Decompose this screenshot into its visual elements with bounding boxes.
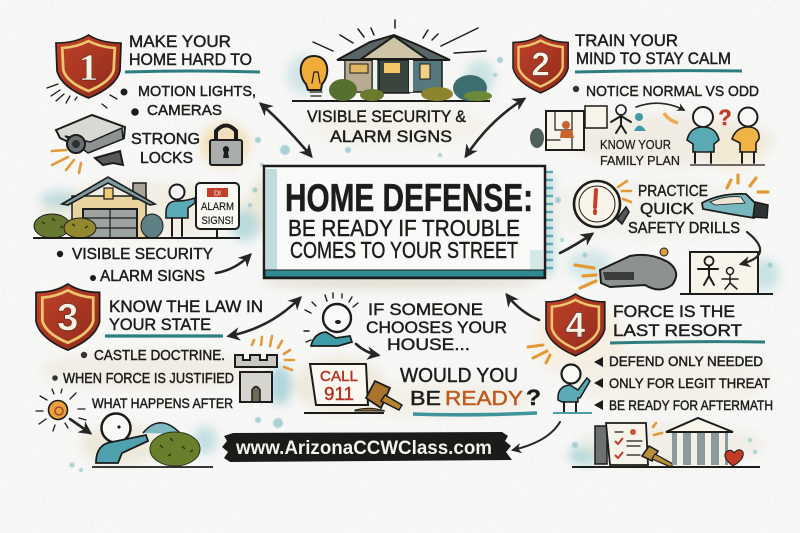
icon: drill board with stick figures [680,252,773,294]
heading: train your mind to stay calm [575,31,731,68]
heading: train your mind to stay calm: MIND TO STAY CALM [576,49,731,68]
label: visible security and alarm signs: ALARM SIGNS [330,127,452,146]
list: motion lights, cameras: MOTION LIGHTS, [138,83,256,100]
subtitle: be ready if trouble comes to your street [288,215,520,263]
label: strong locks: LOCKS [140,150,193,167]
icon: whistle [575,248,676,290]
icon: shield 3 [36,284,100,350]
icon: person holding alarm sign: DI [214,190,221,198]
label: visible security and alarm signs: VISIBLE SECURITY & [307,107,467,126]
list: notice normal vs odd: NOTICE NORMAL VS ODD [586,83,759,100]
icon: padlock [210,126,242,165]
icon: light bulb [301,56,327,96]
icon: shield 4 [546,294,605,356]
list: visible security alarm signs [57,246,213,285]
arrow: title to drills [560,234,592,253]
label: strong locks [131,131,200,167]
icon: gavel small [642,423,673,467]
label: practice quick safety drills: SAFETY DRILLS [628,220,740,237]
list: visible security alarm signs: VISIBLE SECURITY [72,246,213,263]
icon: shield 3: 3 [57,297,78,339]
label: practice quick safety drills [628,183,740,237]
heading: make your home hard to: HOME HARD TO [129,50,252,69]
watercolor washes [40,55,779,467]
icon: heart [725,450,743,466]
panel: step 4 force is the last resort [528,294,773,467]
arrow: top right double [466,99,524,156]
callout: would you be ready: WOULD YOU [400,365,518,387]
panel: step 1 make your home hard to [33,32,260,285]
panel: step 3 know the law [36,284,294,467]
list: castle doctrine, force, after [52,347,234,411]
icon: house with garage [34,177,163,238]
heading: make your home hard to [129,32,252,69]
callout: would you be ready: BE [410,388,441,410]
icon: two people with question mark [664,105,765,165]
list: defend, legit threat, aftermath [594,353,773,413]
icon: call 911 sign [304,364,384,413]
icon: courthouse [666,418,733,465]
list: motion lights, cameras [120,83,256,119]
callout: would you be ready [400,365,541,410]
label: if someone chooses your house: HOUSE... [387,335,470,354]
icon: security camera [52,115,125,173]
list: castle doctrine, force, after: CASTLE DOCTRINE. [94,347,225,364]
callout: would you be ready: ? [526,385,541,410]
icon: house with porch [292,35,492,101]
label: strong locks: STRONG [131,131,200,148]
icon: two people with question mark: ? [718,105,732,130]
heading: know the law in your state: KNOW THE LAW IN [109,297,263,316]
icon: call 911 sign: 911 [324,384,354,404]
icon: castle tower [235,336,294,402]
icon: call 911 sign: CALL [320,368,358,385]
list: motion lights, cameras: CAMERAS [147,102,222,119]
banner: website url [222,432,512,462]
label: practice quick safety drills: QUICK [640,201,694,218]
panel: title box [264,166,553,278]
arrow: top left double [261,104,311,156]
icon: person holding alarm sign [166,183,239,238]
heading: know the law in your state: YOUR STATE [109,315,211,334]
label: know your family plan: FAMILY PLAN [600,153,680,168]
label: if someone chooses your house [366,300,507,354]
icon: checklist document [595,423,648,465]
icon: shield 1: 1 [79,47,98,89]
heading: force is the last resort: FORCE IS THE [613,302,735,321]
heading: force is the last resort [613,302,742,340]
list: castle doctrine, force, after: WHAT HAPPENS AFTER [92,395,233,411]
ink splatter [70,57,772,472]
icon: magnifier alert [574,181,631,227]
list: visible security alarm signs: ALARM SIGNS [100,268,205,285]
panel: step 2 train your mind to stay calm [513,31,773,294]
arrow: person to url [513,422,560,450]
label: practice quick safety drills: PRACTICE [638,183,708,200]
arrow: shield 4 to title [507,295,539,320]
banner: website url: www.ArizonaCCWClass.com [235,438,492,459]
icon: shield 1 [56,35,121,98]
arrow: family to people [636,103,684,110]
arrow: flashlight to board [741,232,760,264]
list: defend, legit threat, aftermath: BE READY FOR AFTERMATH [609,397,773,413]
icon: worried person [304,293,358,346]
heading: know the law in your state [109,297,263,334]
icon: alert sun [36,389,90,433]
subtitle: be ready if trouble comes to your street: COMES TO YOUR STREET [290,237,518,263]
icon: shield 2: 2 [531,46,550,83]
icon: gavel [355,381,402,411]
arrow: law double [229,298,300,336]
heading: force is the last resort: LAST RESORT [613,321,742,340]
label: if someone chooses your house: IF SOMEONE [368,300,483,319]
panel: bottom center question [304,293,541,415]
icon: shield 2 [513,35,568,93]
callout: would you be ready: READY [445,388,523,410]
list: defend, legit threat, aftermath: ONLY FOR LEGIT THREAT [609,375,770,391]
heading: train your mind to stay calm: TRAIN YOUR [575,31,678,50]
subtitle: be ready if trouble comes to your street: BE READY IF TROUBLE [288,215,520,241]
icon: floor plan map [530,106,607,150]
icon: flashlight [702,175,768,218]
list: defend, legit threat, aftermath: DEFEND ONLY NEEDED [609,353,763,369]
arrow: person to call [356,344,378,355]
title: home defense: HOME DEFENSE: [285,177,533,220]
label: know your family plan: KNOW YOUR [600,137,671,152]
label: visible security and alarm signs [307,107,467,146]
list: castle doctrine, force, after: WHEN FORCE IS JUSTIFIED [63,370,234,387]
icon: person raising hand [553,364,592,413]
icon: person holding alarm sign: SIGNS! [202,215,234,227]
icon: shield 4: 4 [566,306,586,345]
icon: person holding alarm sign: ALARM [201,201,234,213]
label: know your family plan [600,137,680,168]
arrow: alarm signs to title [216,255,250,273]
label: if someone chooses your house: CHOOSES YOUR [366,318,507,337]
icon: person and family [611,105,646,133]
icon: person behind bush [92,414,213,467]
panel: top center house [292,20,492,146]
heading: make your home hard to: MAKE YOUR [129,32,231,51]
